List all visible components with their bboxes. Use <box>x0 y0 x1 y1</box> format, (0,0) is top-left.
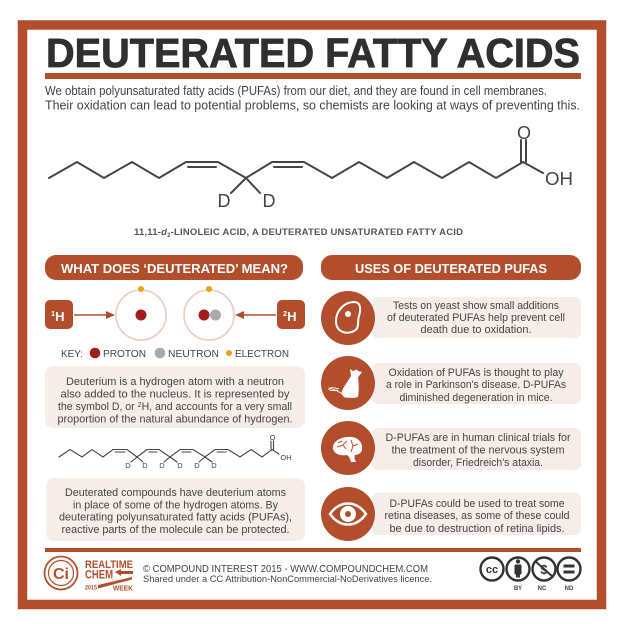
panel: deuterated compounds: Deuterated compounds have deuterium atoms <box>65 487 286 499</box>
panel: deuterium explanation: also added to the nucleus. It is represented by <box>60 388 290 400</box>
panel: retina: be due to destruction of retina lipids. <box>390 523 564 535</box>
licence icons <box>480 558 580 592</box>
small molecule: deuterated PUFA: D <box>125 461 131 470</box>
key <box>61 348 289 360</box>
key: PROTON <box>103 349 146 360</box>
molecule caption: -LINOLEIC ACID, A DEUTERATED UNSATURATED FATTY ACID <box>171 227 463 238</box>
small molecule: deuterated PUFA: D <box>142 461 148 470</box>
key: KEY: <box>61 349 83 360</box>
main molecule: linoleic acid: D <box>262 191 276 211</box>
panel: deuterium explanation: H, and accounts for a very small <box>142 401 292 413</box>
icon: brain <box>321 421 375 475</box>
heading: what does deuterated mean <box>45 255 303 280</box>
small molecule: deuterated PUFA: D <box>194 461 200 470</box>
panel: deuterium explanation: the symbol D, or <box>58 401 138 413</box>
panel: parkinson's: Oxidation of PUFAs is thought to play <box>388 367 564 379</box>
panel: retina <box>372 493 581 535</box>
panel: deuterated compounds: in place of some of the hydrogen atoms. By <box>73 500 278 512</box>
panel: deuterium explanation: 2 <box>138 400 142 409</box>
logo: real time chem week: CHEM <box>85 570 113 582</box>
small molecule: deuterated PUFA: O <box>270 433 276 442</box>
hydrogen atom diagram: H <box>55 309 65 324</box>
panel: friedreich's: the treatment of the nervous system <box>392 444 564 456</box>
panel: deuterated compounds: reactive parts of the molecule can be protected. <box>62 524 290 536</box>
hydrogen atom diagram <box>45 286 166 340</box>
main molecule: linoleic acid: O <box>517 123 531 143</box>
deuterium atom diagram: H <box>287 309 297 324</box>
heading: uses of deuterated pufas <box>321 255 581 280</box>
small molecule: deuterated PUFA <box>59 433 292 470</box>
panel: retina: D-PUFAs could be used to treat some <box>390 498 564 510</box>
licence icons: BY <box>514 586 522 592</box>
logo: compound interest: Ci <box>53 566 69 583</box>
key: NEUTRON <box>168 349 219 360</box>
heading: what does deuterated mean: WHAT DOES ‘DEUTERATED’ MEAN? <box>61 261 288 276</box>
panel: yeast: Tests on yeast show small additions <box>393 300 559 312</box>
icon: cell <box>321 291 375 345</box>
footer text: Shared under a CC Attribution-NonCommercial-NoDerivatives licence. <box>143 574 432 585</box>
icon: mouse <box>321 356 375 410</box>
intro text: We obtain polyunsaturated fatty acids (PUFAs) from our diet, and they are found in cell membranes. <box>45 84 547 98</box>
logo: real time chem week <box>85 559 134 592</box>
footer rule <box>45 548 581 552</box>
footer text: © COMPOUND INTEREST 2015 - WWW.COMPOUNDCHEM.COM <box>143 564 428 575</box>
molecule caption: 11,11-d <box>134 227 167 238</box>
panel: deuterated compounds: deuterating polyunsaturated fatty acids (PUFAs), <box>59 512 292 524</box>
deuterium atom diagram: 2 <box>283 309 287 318</box>
title: DEUTERATED FATTY ACIDS <box>46 30 580 76</box>
panel: yeast: death due to oxidation. <box>420 324 532 336</box>
deuterium atom diagram <box>184 286 305 340</box>
logo: compound interest <box>44 556 78 590</box>
panel: retina: retina diseases, as some of these could <box>384 510 570 522</box>
licence icons: $ <box>540 562 548 577</box>
panel: friedreich's <box>372 428 581 470</box>
panel: yeast: of deuterated PUFAs help prevent cell <box>387 312 565 324</box>
licence icons: NC <box>538 586 547 592</box>
panel: deuterium explanation: Deuterium is a hydrogen atom with a neutron <box>66 376 284 388</box>
panel: deuterium explanation <box>45 366 305 428</box>
main molecule: linoleic acid: OH <box>545 169 573 189</box>
panel: deuterated compounds <box>46 478 305 541</box>
licence icons: cc <box>486 564 498 576</box>
main molecule: linoleic acid <box>49 123 573 211</box>
icon: eye <box>321 487 375 541</box>
logo: real time chem week: 2015 <box>85 584 97 592</box>
logo: real time chem week: WEEK <box>113 584 134 592</box>
panel: deuterium explanation: proportion of the natural abundance of hydrogen. <box>58 414 292 426</box>
licence icons: ND <box>565 586 574 592</box>
panel: yeast <box>372 297 581 338</box>
intro text: Their oxidation can lead to potential problems, so chemists are looking at ways of preventing this. <box>45 98 580 112</box>
small molecule: deuterated PUFA: D <box>211 461 217 470</box>
small molecule: deuterated PUFA: D <box>159 461 165 470</box>
panel: friedreich's: D-PUFAs are in human clinical trials for <box>386 432 571 444</box>
footer text <box>143 564 432 585</box>
panel: parkinson's <box>372 363 581 404</box>
panel: friedreich's: disorder, Friedreich's ataxia. <box>413 457 543 469</box>
main molecule: linoleic acid: D <box>218 191 230 211</box>
panel: parkinson's: a role in Parkinson's disease. D-PUFAs <box>386 379 566 391</box>
intro text <box>45 84 580 112</box>
small molecule: deuterated PUFA: OH <box>280 453 292 462</box>
heading: uses of deuterated pufas: USES OF DEUTERATED PUFAS <box>355 261 547 276</box>
panel: parkinson's: diminished degeneration in mice. <box>400 392 552 404</box>
small molecule: deuterated PUFA: D <box>177 461 183 470</box>
key: ELECTRON <box>235 349 289 360</box>
molecule caption: 2 <box>167 233 171 239</box>
hydrogen atom diagram: 1 <box>51 309 55 318</box>
logo: real time chem week: REALTIME <box>85 559 133 571</box>
